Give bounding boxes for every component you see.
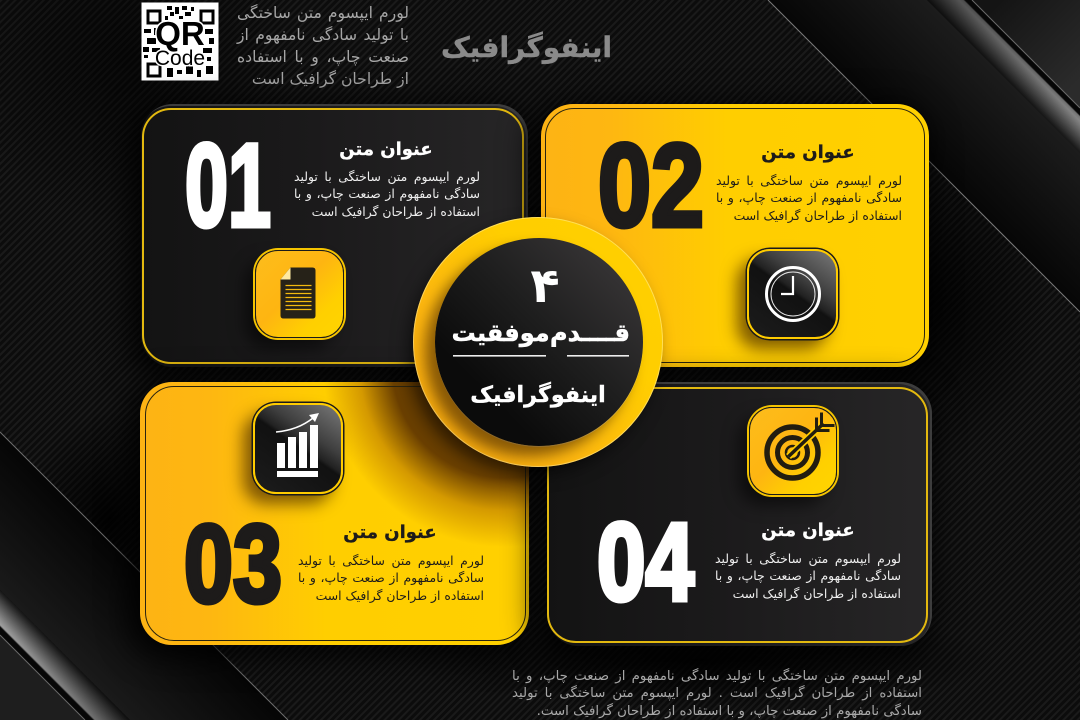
footer description text: سادگی نامفهوم از صنعت چاپ، و با استفاده از طراحان گرافیک است. — [537, 704, 922, 719]
footer description text: استفاده از طراحان گرافیک است . لورم ایپسوم متن ساختگی با تولید — [512, 686, 922, 701]
description: سادگی نامفهوم از صنعت چاپ، و با — [716, 190, 902, 205]
underline — [453, 355, 629, 357]
panel border — [545, 108, 925, 363]
icon: document — [255, 250, 344, 338]
panel 02 — [541, 104, 929, 367]
heading: steps to success: قــــدم موفقیت — [452, 319, 630, 347]
description: استفاده از طراحان گرافیک است — [316, 588, 484, 603]
center badge — [413, 217, 663, 467]
header description text: لورم ایپسوم متن ساختگی — [237, 4, 409, 22]
header title: اینفوگرافیک — [441, 31, 612, 64]
QR code: QR — [155, 15, 205, 52]
description: سادگی نامفهوم از صنعت چاپ، و با — [298, 570, 484, 585]
description: استفاده از طراحان گرافیک است — [312, 204, 480, 219]
circle cast shadow — [140, 382, 529, 645]
description: لورم ایپسوم متن ساختگی با تولید — [298, 553, 484, 568]
icon: target — [749, 407, 837, 495]
description — [715, 551, 901, 601]
description — [298, 553, 484, 603]
description: سادگی نامفهوم از صنعت چاپ، و با — [294, 186, 480, 201]
icon: clock — [747, 249, 838, 339]
description — [716, 173, 902, 223]
description: لورم ایپسوم متن ساختگی با تولید — [716, 173, 902, 188]
panel 01 — [141, 104, 528, 367]
description — [294, 169, 480, 219]
label: infographic: اینفوگرافیک — [470, 382, 606, 408]
description: استفاده از طراحان گرافیک است — [734, 208, 902, 223]
header description text — [236, 4, 409, 88]
QR code — [142, 2, 218, 80]
panel 04 — [547, 382, 932, 646]
icon: growth chart — [253, 403, 343, 494]
description: لورم ایپسوم متن ساختگی با تولید — [715, 551, 901, 566]
panel border — [547, 387, 928, 643]
title: عنوان متن — [761, 142, 855, 163]
footer description text: لورم ایپسوم متن ساختگی با تولید سادگی نامفهوم از صنعت چاپ، و با — [512, 669, 922, 684]
title: عنوان متن — [343, 522, 437, 543]
title: عنوان متن — [339, 139, 433, 160]
description: استفاده از طراحان گرافیک است — [733, 586, 901, 601]
header description text: صنعت چاپ، و با استفاده — [237, 48, 409, 66]
description: لورم ایپسوم متن ساختگی با تولید — [294, 169, 480, 184]
panel 03 — [140, 382, 529, 645]
title: عنوان متن — [761, 520, 855, 541]
header description text: از طراحان گرافیک است — [252, 70, 409, 88]
panel border — [142, 108, 524, 364]
panel border — [145, 386, 526, 641]
inner black circle — [435, 238, 643, 446]
footer description text — [512, 668, 922, 719]
header description text: با تولید سادگی نامفهوم از — [237, 26, 409, 44]
description: سادگی نامفهوم از صنعت چاپ، و با — [715, 568, 901, 583]
number four: ۴ — [530, 258, 560, 314]
QR code: Code — [155, 47, 205, 70]
